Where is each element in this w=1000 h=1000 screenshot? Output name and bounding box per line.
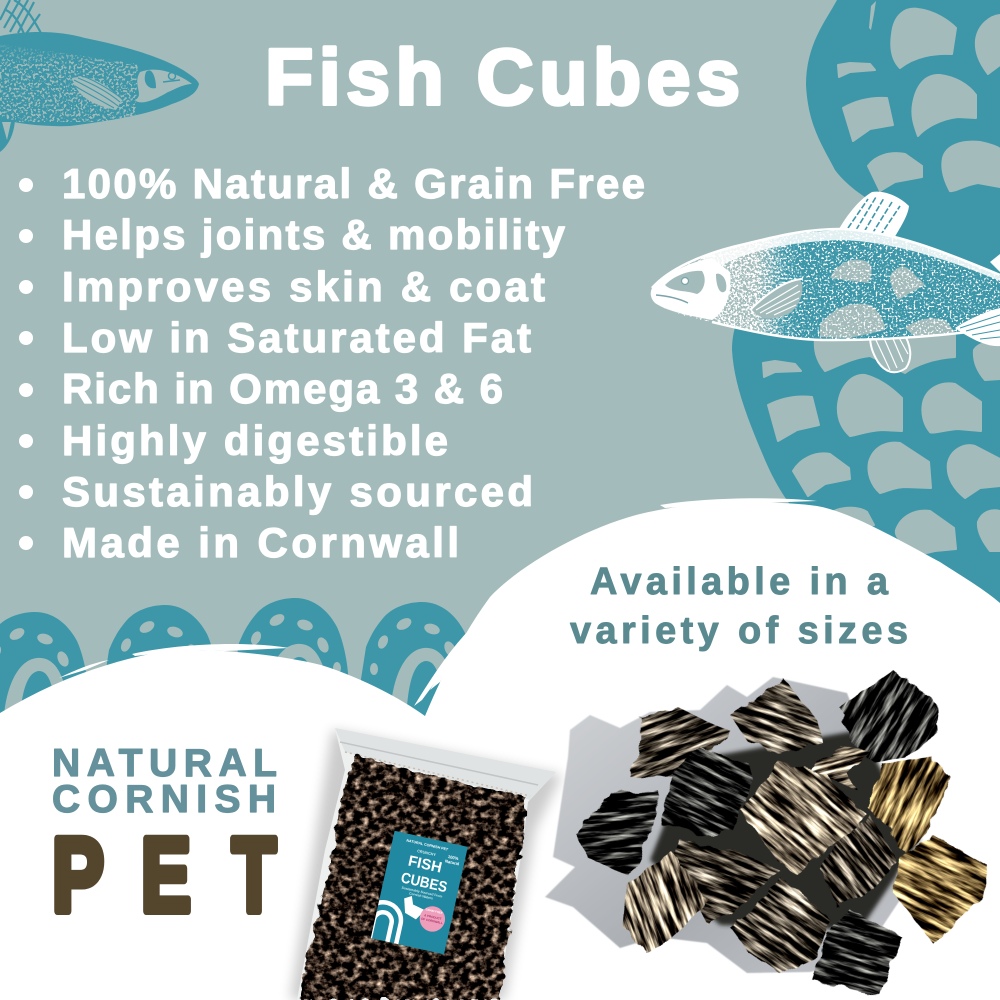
bag film bbox=[297, 728, 556, 1000]
heading: available sizes: Available in a bbox=[590, 561, 889, 603]
benefit lines: Rich in Omega 3 & 6 bbox=[62, 365, 503, 412]
grey markings bbox=[820, 260, 955, 338]
icon: teal fish top left bbox=[0, 0, 199, 152]
product label: Natural bbox=[445, 858, 460, 866]
product label: FISH bbox=[406, 853, 444, 877]
product label: Cornish Waters bbox=[409, 891, 434, 901]
bag header seal bbox=[335, 728, 556, 800]
tail fin bbox=[955, 308, 1000, 346]
body speckle bbox=[651, 229, 1000, 340]
product label: Sustainably Sourced From bbox=[401, 886, 443, 899]
pink stamp: OF CORNWALL bbox=[421, 917, 443, 925]
bag contents bbox=[300, 754, 525, 1000]
icon: rainbow arch bbox=[370, 900, 404, 944]
benefit lines: Improves skin & coat bbox=[62, 263, 545, 310]
benefits list bbox=[19, 160, 645, 566]
benefit lines: Highly digestible bbox=[62, 417, 448, 464]
icon: white fish bbox=[651, 192, 1000, 372]
bag shadow bbox=[290, 730, 562, 1000]
adipose fin bbox=[990, 254, 1000, 272]
cube pieces bbox=[568, 627, 1000, 1000]
white hump: left bbox=[0, 644, 430, 1000]
body highlights bbox=[700, 230, 1000, 281]
pink stamp: GRAIN FREE bbox=[425, 907, 443, 915]
decorative fish-scale shape bbox=[732, 0, 1000, 620]
pink stamp: A PRODUCT bbox=[424, 913, 442, 921]
heading: available sizes: variety of sizes bbox=[570, 610, 908, 652]
benefit lines: Sustainably sourced bbox=[62, 468, 533, 515]
head bbox=[651, 258, 730, 320]
cast shadow bbox=[545, 677, 900, 973]
product label: 100% bbox=[447, 854, 459, 861]
pelvic fin bbox=[870, 332, 910, 372]
logo: Natural Cornish Pet bbox=[52, 742, 277, 934]
pectoral fin bbox=[750, 279, 802, 319]
title: Fish Cubes bbox=[265, 32, 740, 121]
benefit lines: Low in Saturated Fat bbox=[62, 314, 531, 361]
dorsal fin bbox=[838, 192, 909, 240]
logo: Natural Cornish Pet: NATURAL bbox=[52, 742, 277, 785]
benefit lines: 100% Natural & Grain Free bbox=[62, 160, 645, 207]
logo: Natural Cornish Pet: P bbox=[52, 817, 104, 934]
product label bbox=[370, 830, 468, 954]
product label: NATURAL CORNISH PET bbox=[406, 839, 449, 852]
pink stamp bbox=[417, 904, 448, 934]
logo: Natural Cornish Pet: E bbox=[141, 817, 191, 934]
benefit lines: Helps joints & mobility bbox=[62, 211, 566, 258]
product label: CRUNCHY bbox=[417, 849, 437, 857]
icon: dog head bbox=[400, 894, 427, 921]
benefit lines bbox=[62, 160, 645, 566]
product photo: bag of fish cubes bbox=[290, 728, 562, 1000]
decorative arches bbox=[0, 598, 480, 734]
product label: CUBES bbox=[399, 869, 449, 896]
heading: available sizes bbox=[570, 561, 908, 652]
fish body bbox=[651, 229, 1000, 340]
left body speckle bbox=[701, 236, 798, 337]
logo: Natural Cornish Pet: CORNISH bbox=[52, 778, 276, 821]
bullets bbox=[19, 178, 33, 550]
logo: Natural Cornish Pet: T bbox=[232, 817, 276, 934]
benefit lines: Made in Cornwall bbox=[62, 519, 459, 566]
white hump: right bbox=[414, 498, 1000, 1000]
dark underlay bbox=[650, 730, 920, 930]
product photo: fish cubes pile bbox=[545, 627, 1000, 1000]
